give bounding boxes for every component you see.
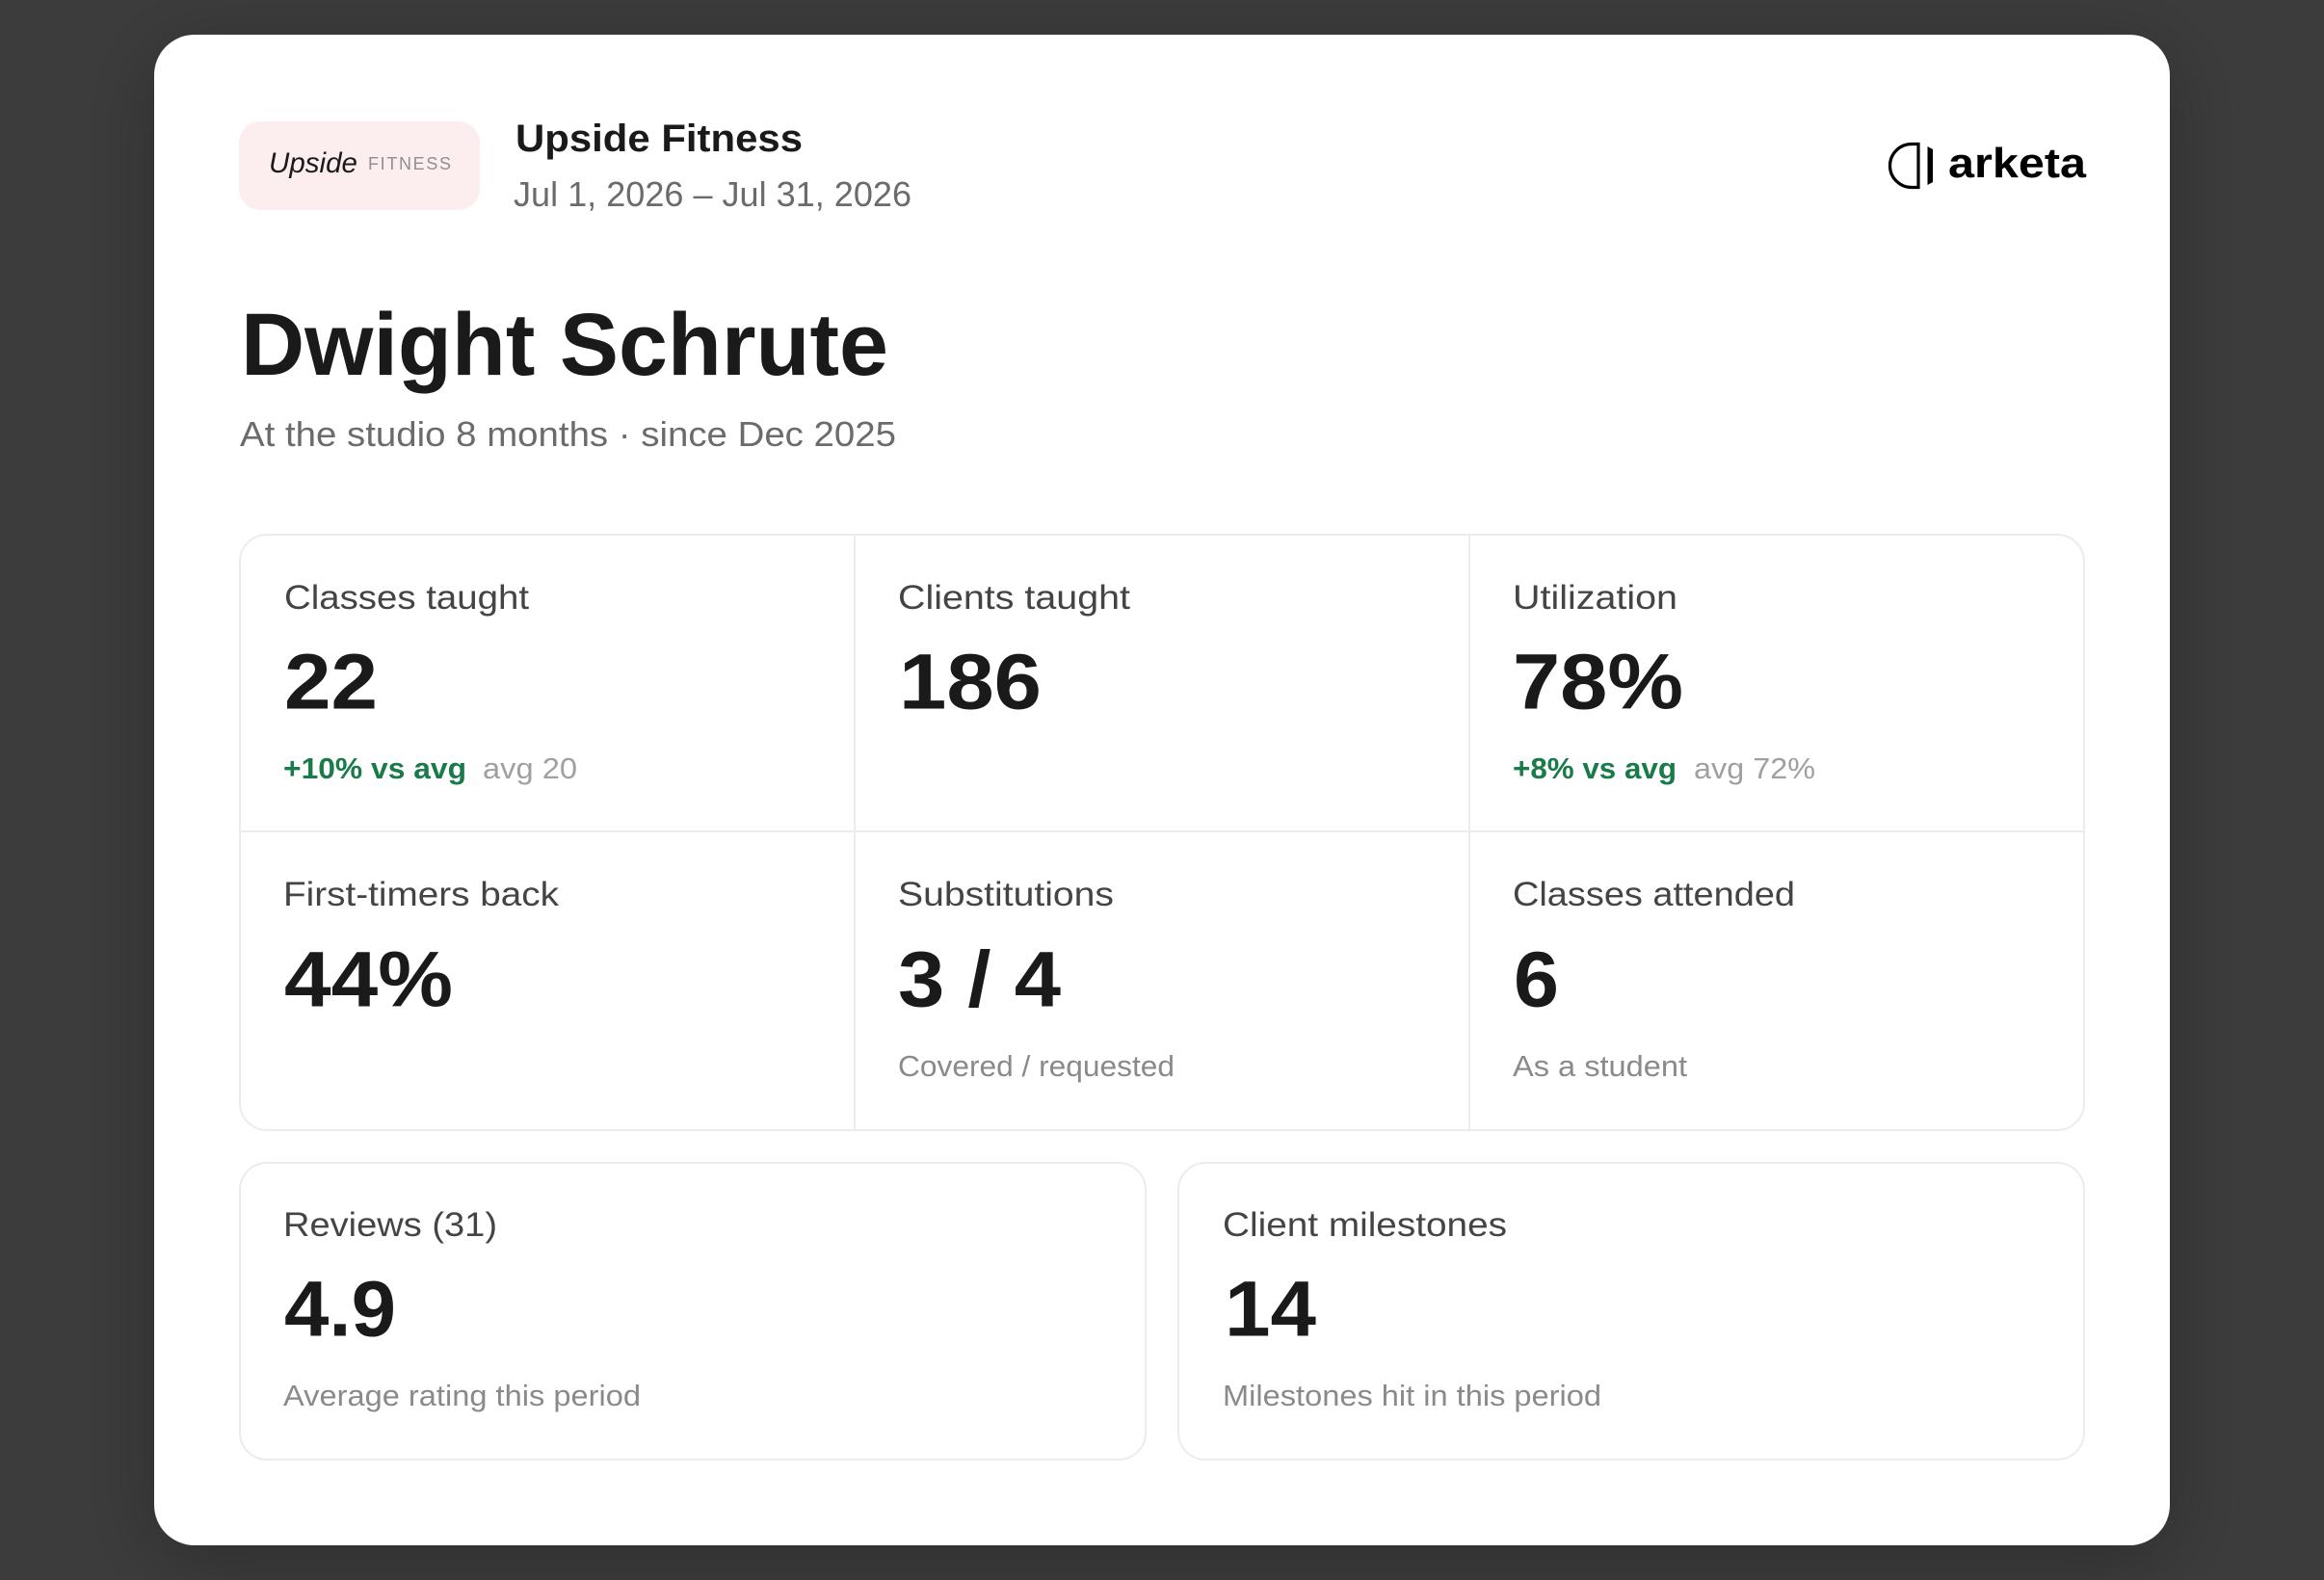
panel: client milestones: Client milestones (1223, 1206, 1507, 1244)
metric: classes attended (1513, 876, 1795, 1083)
metric: first-timers back: 44% (284, 936, 453, 1023)
panel: reviews: 4.9 (284, 1266, 396, 1353)
metric: clients taught: 186 (899, 638, 1042, 726)
metric: substitutions: Covered / requested (898, 1049, 1175, 1083)
date range: Jul 1, 2026 – Jul 31, 2026 (514, 174, 911, 214)
metric: utilization: avg 72% (1694, 751, 1815, 785)
studio logo chip: FITNESS (368, 154, 451, 173)
panel: client milestones: 14 (1225, 1266, 1316, 1353)
metric: classes attended: As a student (1513, 1049, 1687, 1083)
icon: arketa mark (1890, 145, 1933, 187)
studio logo chip (239, 121, 480, 210)
metric: clients taught: Clients taught (898, 579, 1130, 617)
studio logo chip: Upside (269, 147, 357, 179)
panel: client milestones (1178, 1163, 2084, 1460)
metric: substitutions (898, 876, 1175, 1083)
panel: reviews: Average rating this period (283, 1379, 641, 1412)
metric: classes taught: Classes taught (284, 579, 529, 617)
panel: reviews (240, 1163, 1146, 1460)
metric: utilization: Utilization (1513, 579, 1677, 617)
metric: utilization: +8% vs avg (1513, 751, 1677, 785)
arketa logo (1890, 140, 2087, 187)
header: studio (239, 118, 911, 214)
person name: Dwight Schrute (241, 296, 888, 394)
tenure subtitle: At the studio 8 months · since Dec 2025 (240, 414, 896, 454)
metric: classes taught (283, 579, 577, 785)
metric: classes taught: +10% vs avg (283, 751, 466, 785)
metric: clients taught (898, 579, 1130, 726)
panel: reviews: Reviews (31) (283, 1206, 497, 1244)
arketa logo: arketa (1948, 140, 2087, 187)
metric: substitutions: Substitutions (898, 876, 1114, 913)
metric: first-timers back: First-timers back (283, 876, 560, 913)
metric: first-timers back (283, 876, 560, 1023)
metric: classes taught: 22 (284, 638, 378, 726)
metric: classes attended: Classes attended (1513, 876, 1795, 913)
metric: classes attended: 6 (1514, 936, 1559, 1023)
panel: client milestones: Milestones hit in this period (1223, 1379, 1601, 1412)
metric: classes taught: avg 20 (483, 751, 577, 785)
metric: substitutions: 3 / 4 (898, 936, 1061, 1023)
studio name: Upside Fitness (515, 118, 803, 160)
panel: metrics grid (240, 535, 2084, 1130)
metric: utilization: 78% (1513, 638, 1683, 726)
metric: utilization (1513, 579, 1815, 785)
